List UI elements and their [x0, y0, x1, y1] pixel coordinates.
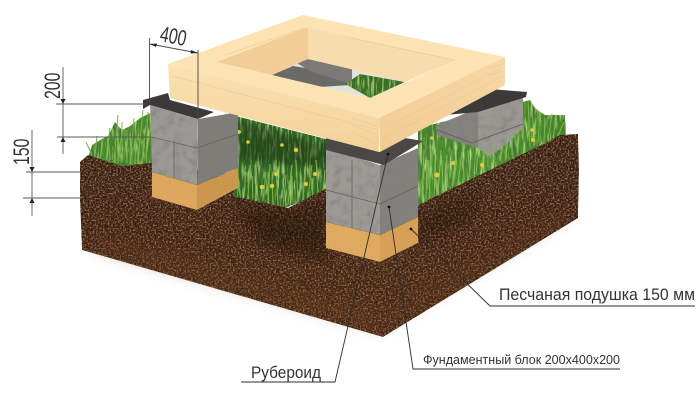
callout: foundation block — [388, 206, 620, 369]
timber frame — [168, 15, 505, 152]
back pillar seen through frame — [272, 59, 405, 98]
frame: left outer face — [168, 64, 379, 152]
pillar: left — [143, 93, 238, 210]
concrete block: front pillar — [326, 148, 418, 235]
soil block — [80, 134, 579, 337]
frame: wood grain — [172, 28, 503, 146]
dimension: 400 — [150, 23, 198, 118]
pillar: right — [437, 87, 527, 158]
dimension: 150 — [11, 130, 82, 216]
frame: right outer face — [379, 57, 505, 152]
dimension: 200: 200 — [42, 73, 66, 99]
callout: roofing felt — [241, 153, 389, 382]
concrete block: left pillar — [150, 105, 238, 185]
pillar: front — [326, 135, 423, 262]
grass: right foreground — [418, 128, 560, 205]
callout: foundation block: Фундаментный блок 200х400х200 — [423, 352, 620, 367]
roofing: right pillar — [445, 87, 527, 115]
roofing: left pillar — [143, 93, 214, 119]
sand cushion: front pillar — [326, 217, 418, 262]
frame: inner walls — [216, 27, 308, 75]
frame: top faces — [168, 15, 505, 118]
grass: centre — [233, 116, 332, 208]
grass: right — [418, 100, 566, 205]
sand cushion: left pillar — [152, 168, 238, 210]
dimension: 150: 150 — [11, 139, 35, 165]
foundation illustration — [80, 15, 579, 337]
grass: back left — [86, 110, 152, 166]
dimension: 400: 400 — [158, 23, 188, 52]
callout: sand cushion — [410, 228, 695, 306]
callout: roofing felt: Рубероид — [251, 363, 321, 382]
roofing: front pillar — [326, 135, 423, 165]
dimension: 200 — [42, 67, 150, 154]
